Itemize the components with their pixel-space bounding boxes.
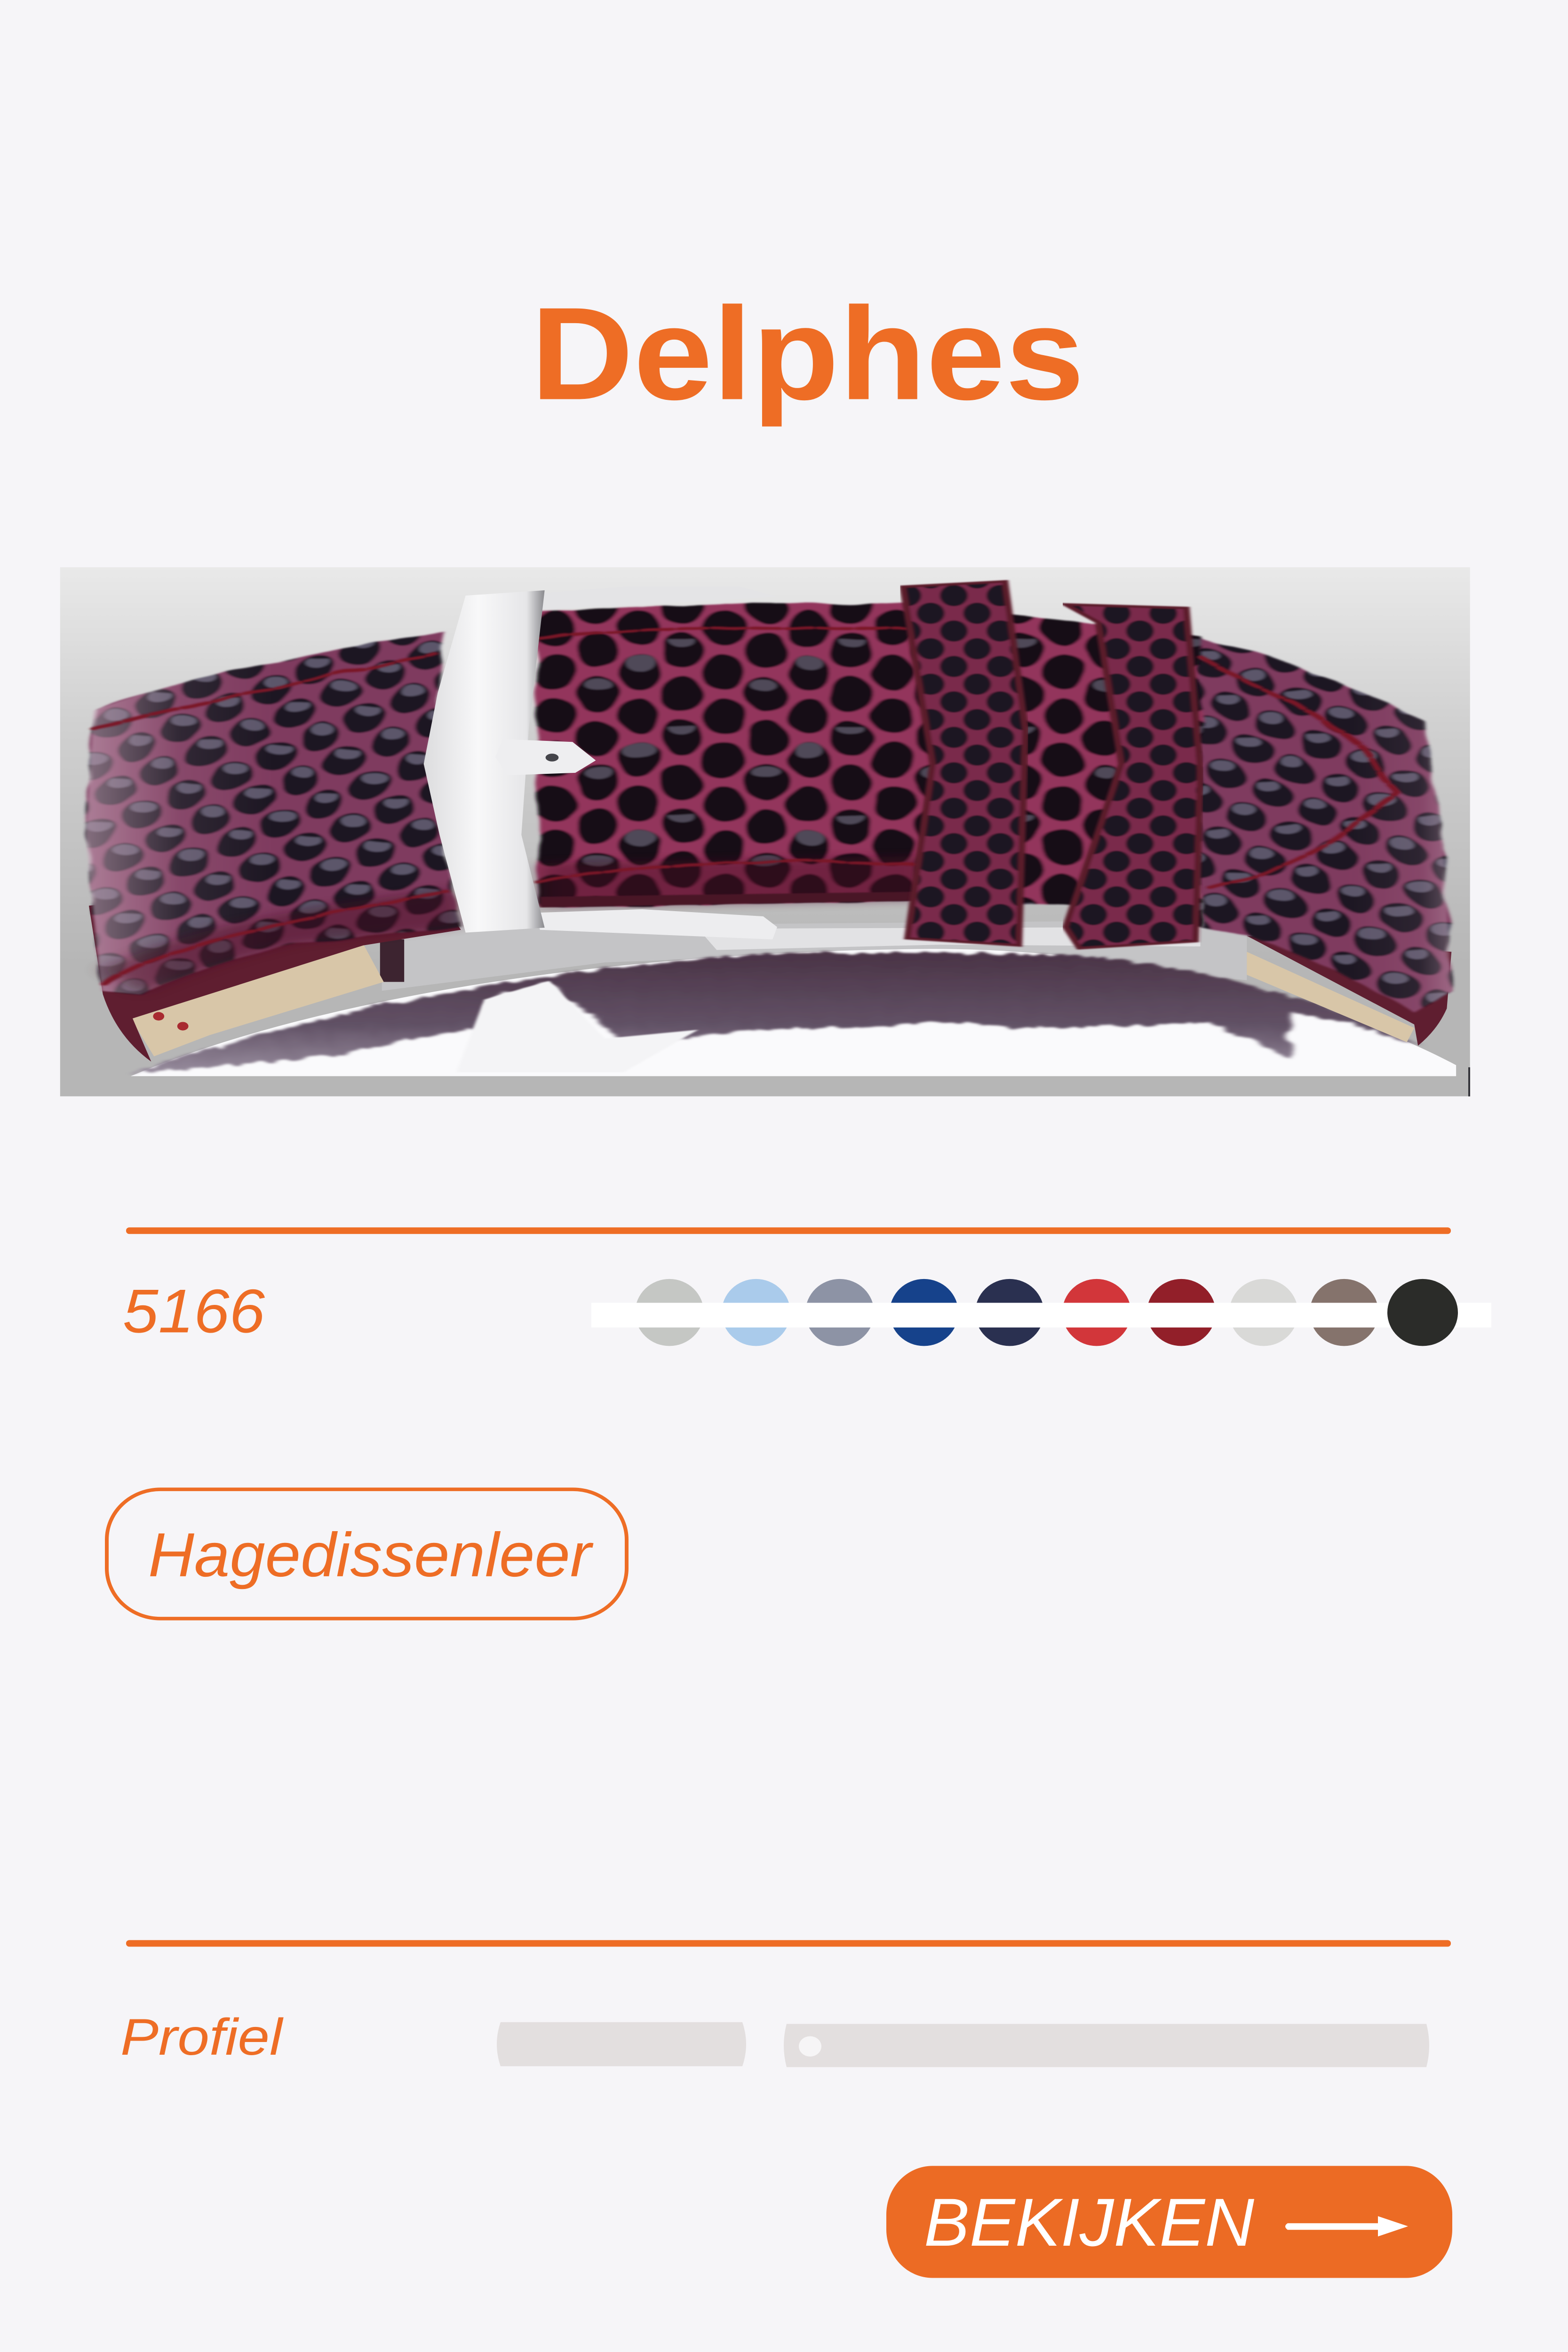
white case body	[131, 949, 1456, 1076]
strap centre section	[535, 603, 1200, 927]
strap edge right	[1247, 936, 1451, 1046]
strap right section	[1191, 636, 1451, 1012]
title: Delphes	[531, 280, 1084, 428]
strap loop 2	[1066, 604, 1200, 948]
button: BEKIJKEN	[924, 2184, 1254, 2260]
bottom divider	[126, 1940, 1451, 1947]
cream lining left	[131, 944, 384, 1057]
material pill	[107, 1489, 627, 1619]
dark lug bar	[380, 939, 404, 982]
highlight band on the case	[698, 927, 1200, 950]
buckle prong	[495, 739, 596, 775]
black swatch	[1387, 1279, 1458, 1346]
photo backdrop	[60, 567, 1470, 1097]
product photo: lizard leather strap with buckle	[60, 567, 1470, 1097]
right edge line of the photo	[1468, 1067, 1470, 1097]
white band across swatches	[591, 1303, 1491, 1327]
buckle bottom bar	[535, 909, 777, 939]
silver case behind strap	[382, 920, 1247, 991]
material pill: Hagedissenleer	[148, 1520, 594, 1589]
cream lining right	[1247, 952, 1414, 1042]
arrow icon	[1285, 2216, 1408, 2236]
strap edge left	[89, 870, 461, 1062]
lower edge of centre strap	[540, 891, 931, 907]
stitch marks on lining	[153, 1012, 189, 1031]
buckle top bar	[535, 587, 777, 610]
button	[886, 2166, 1452, 2278]
colour swatches	[591, 1279, 1491, 1346]
profile shape: short piece	[497, 2022, 746, 2066]
buckle frame	[424, 590, 545, 933]
profile label: Profiel	[120, 2008, 284, 2066]
top divider	[126, 1227, 1451, 1234]
stitching	[94, 628, 1396, 984]
profile shape: long piece with hole	[784, 2024, 1429, 2067]
bright reflection flare	[456, 981, 698, 1072]
left edge fade	[86, 631, 461, 994]
model number: 5166	[123, 1276, 265, 1345]
watch case with reflection	[131, 949, 1456, 1076]
strap left section	[86, 631, 461, 994]
darker lower strap shading	[103, 856, 931, 994]
right edge fade	[1191, 636, 1451, 1012]
purple reflection	[133, 952, 1425, 1074]
strap loop 1	[903, 581, 1026, 946]
